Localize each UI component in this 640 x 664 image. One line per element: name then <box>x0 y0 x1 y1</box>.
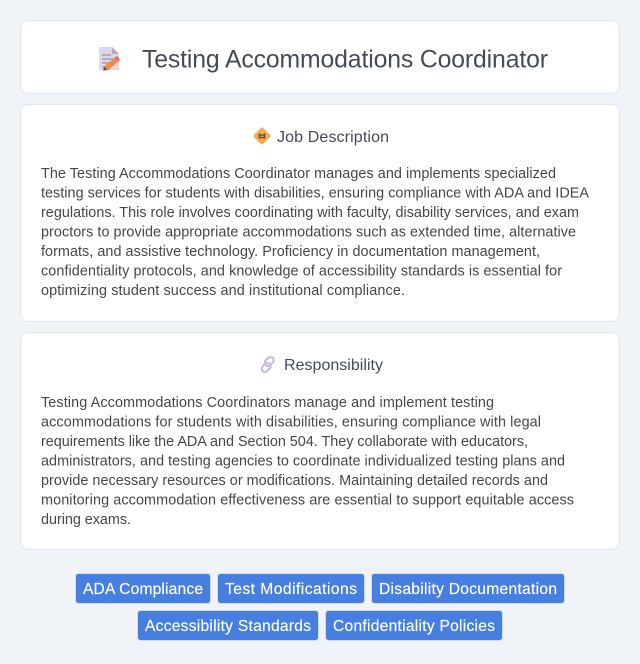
text block: responsibility: administrators, and testing agencies to coordinate individualized testing plans and <box>41 454 565 470</box>
title: Testing Accommodations Coordinator <box>142 46 548 74</box>
text block: job description: testing services for students with disabilities, ensuring compliance with ADA and IDEA <box>41 186 589 202</box>
text block: job description: optimizing student success and institutional compliance. <box>41 283 405 299</box>
heading: job description: Job Description <box>277 129 389 146</box>
text block: job description: regulations. This role involves coordinating with faculty, disability services, and exam <box>41 205 579 221</box>
panel: job description <box>20 104 620 322</box>
text block: responsibility: requirements like the ADA and Section 504. They collaborate with educators, <box>41 434 528 450</box>
text block: job description: confidentiality protocols, and knowledge of accessibility standards is essential for <box>41 264 562 280</box>
icon: document with pencil <box>99 47 120 70</box>
tag: Accessibility Standards: Accessibility Standards <box>145 618 311 635</box>
icon: orange diamond sign <box>253 127 271 145</box>
text block: responsibility: during exams. <box>41 512 131 528</box>
text block: job description: The Testing Accommodations Coordinator manages and implements specialized <box>41 166 556 182</box>
tag: Confidentiality Policies <box>326 610 502 640</box>
tag: ADA Compliance <box>76 574 210 604</box>
tag: Accessibility Standards <box>138 610 318 640</box>
icon: chain link <box>260 356 275 373</box>
text block: responsibility: provide necessary resources or modifications. Maintaining detailed records and <box>41 473 548 489</box>
text block: responsibility: Testing Accommodations Coordinators manage and implement testing <box>41 395 494 411</box>
tag: Test Modifications <box>218 574 364 604</box>
heading: responsibility: Responsibility <box>284 357 383 374</box>
tag: Confidentiality Policies: Confidentiality Policies <box>333 618 495 635</box>
panel: title card <box>20 20 620 94</box>
text block: job description <box>41 166 589 299</box>
text block: job description: proctors to provide appropriate accommodations such as extended time, alternative <box>41 224 576 240</box>
tag: Test Modifications: Test Modifications <box>225 581 357 598</box>
text block: responsibility: accommodations for students with disabilities, ensuring compliance with legal <box>41 414 541 430</box>
text block: job description: formats, and assistive technology. Proficiency in documentation management, <box>41 244 540 260</box>
text block: responsibility: monitoring accommodation effectiveness are essential to support equitable access <box>41 492 574 508</box>
text block: responsibility <box>41 395 574 528</box>
tag: ADA Compliance: ADA Compliance <box>83 581 203 598</box>
panel: responsibility <box>20 332 620 550</box>
tag: Disability Documentation <box>372 574 564 604</box>
tag: Disability Documentation: Disability Documentation <box>379 581 557 598</box>
